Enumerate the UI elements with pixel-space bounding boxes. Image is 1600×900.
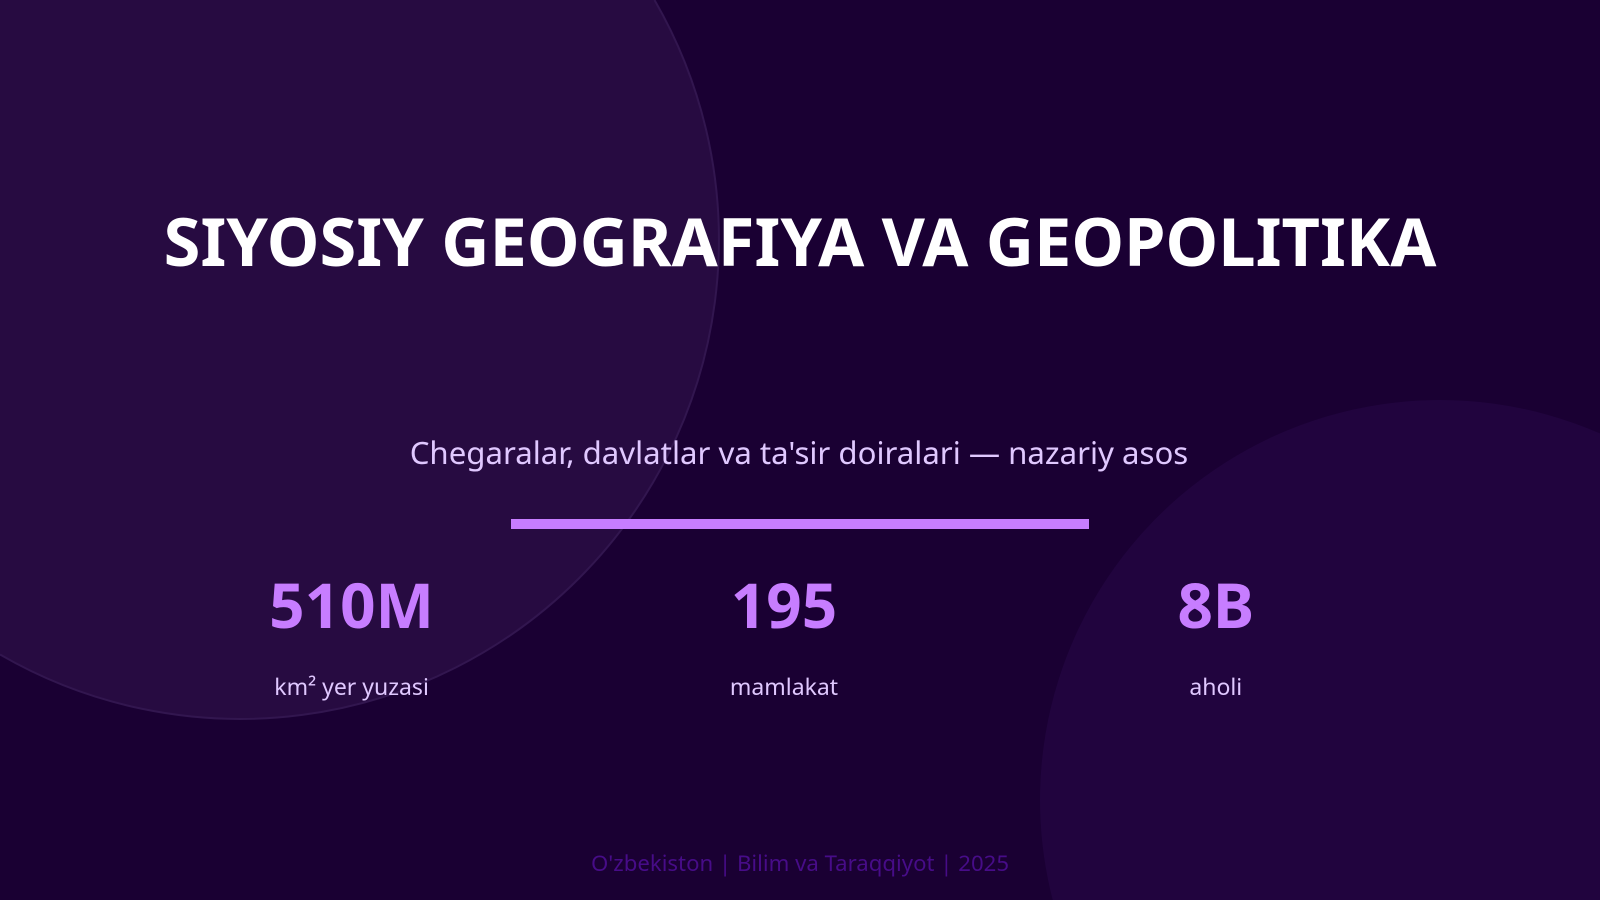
stat: population — [1177, 563, 1254, 702]
stat label: countries: mamlakat — [730, 670, 838, 702]
stat: area — [269, 563, 434, 702]
stat label: population: aholi — [1189, 670, 1242, 702]
footer: O'zbekiston | Bilim va Taraqqiyot | 2025 — [591, 847, 1009, 878]
subtitle: Chegaralar, davlatlar va ta'sir doiralari — nazariy asos — [410, 432, 1188, 474]
background circle: top left — [0, 0, 719, 719]
title: SIYOSIY GEOGRAFIYA VA GEOPOLITIKA — [164, 195, 1436, 286]
stat label: area: km² yer yuzasi — [274, 670, 429, 702]
stat value: 8B: 8B — [1177, 563, 1254, 647]
stat value: 195: 195 — [731, 563, 837, 647]
stat value: 510M: 510M — [269, 563, 434, 647]
background circle: bottom right — [1040, 400, 1600, 900]
accent bar — [511, 519, 1089, 529]
stat: countries — [730, 563, 838, 702]
